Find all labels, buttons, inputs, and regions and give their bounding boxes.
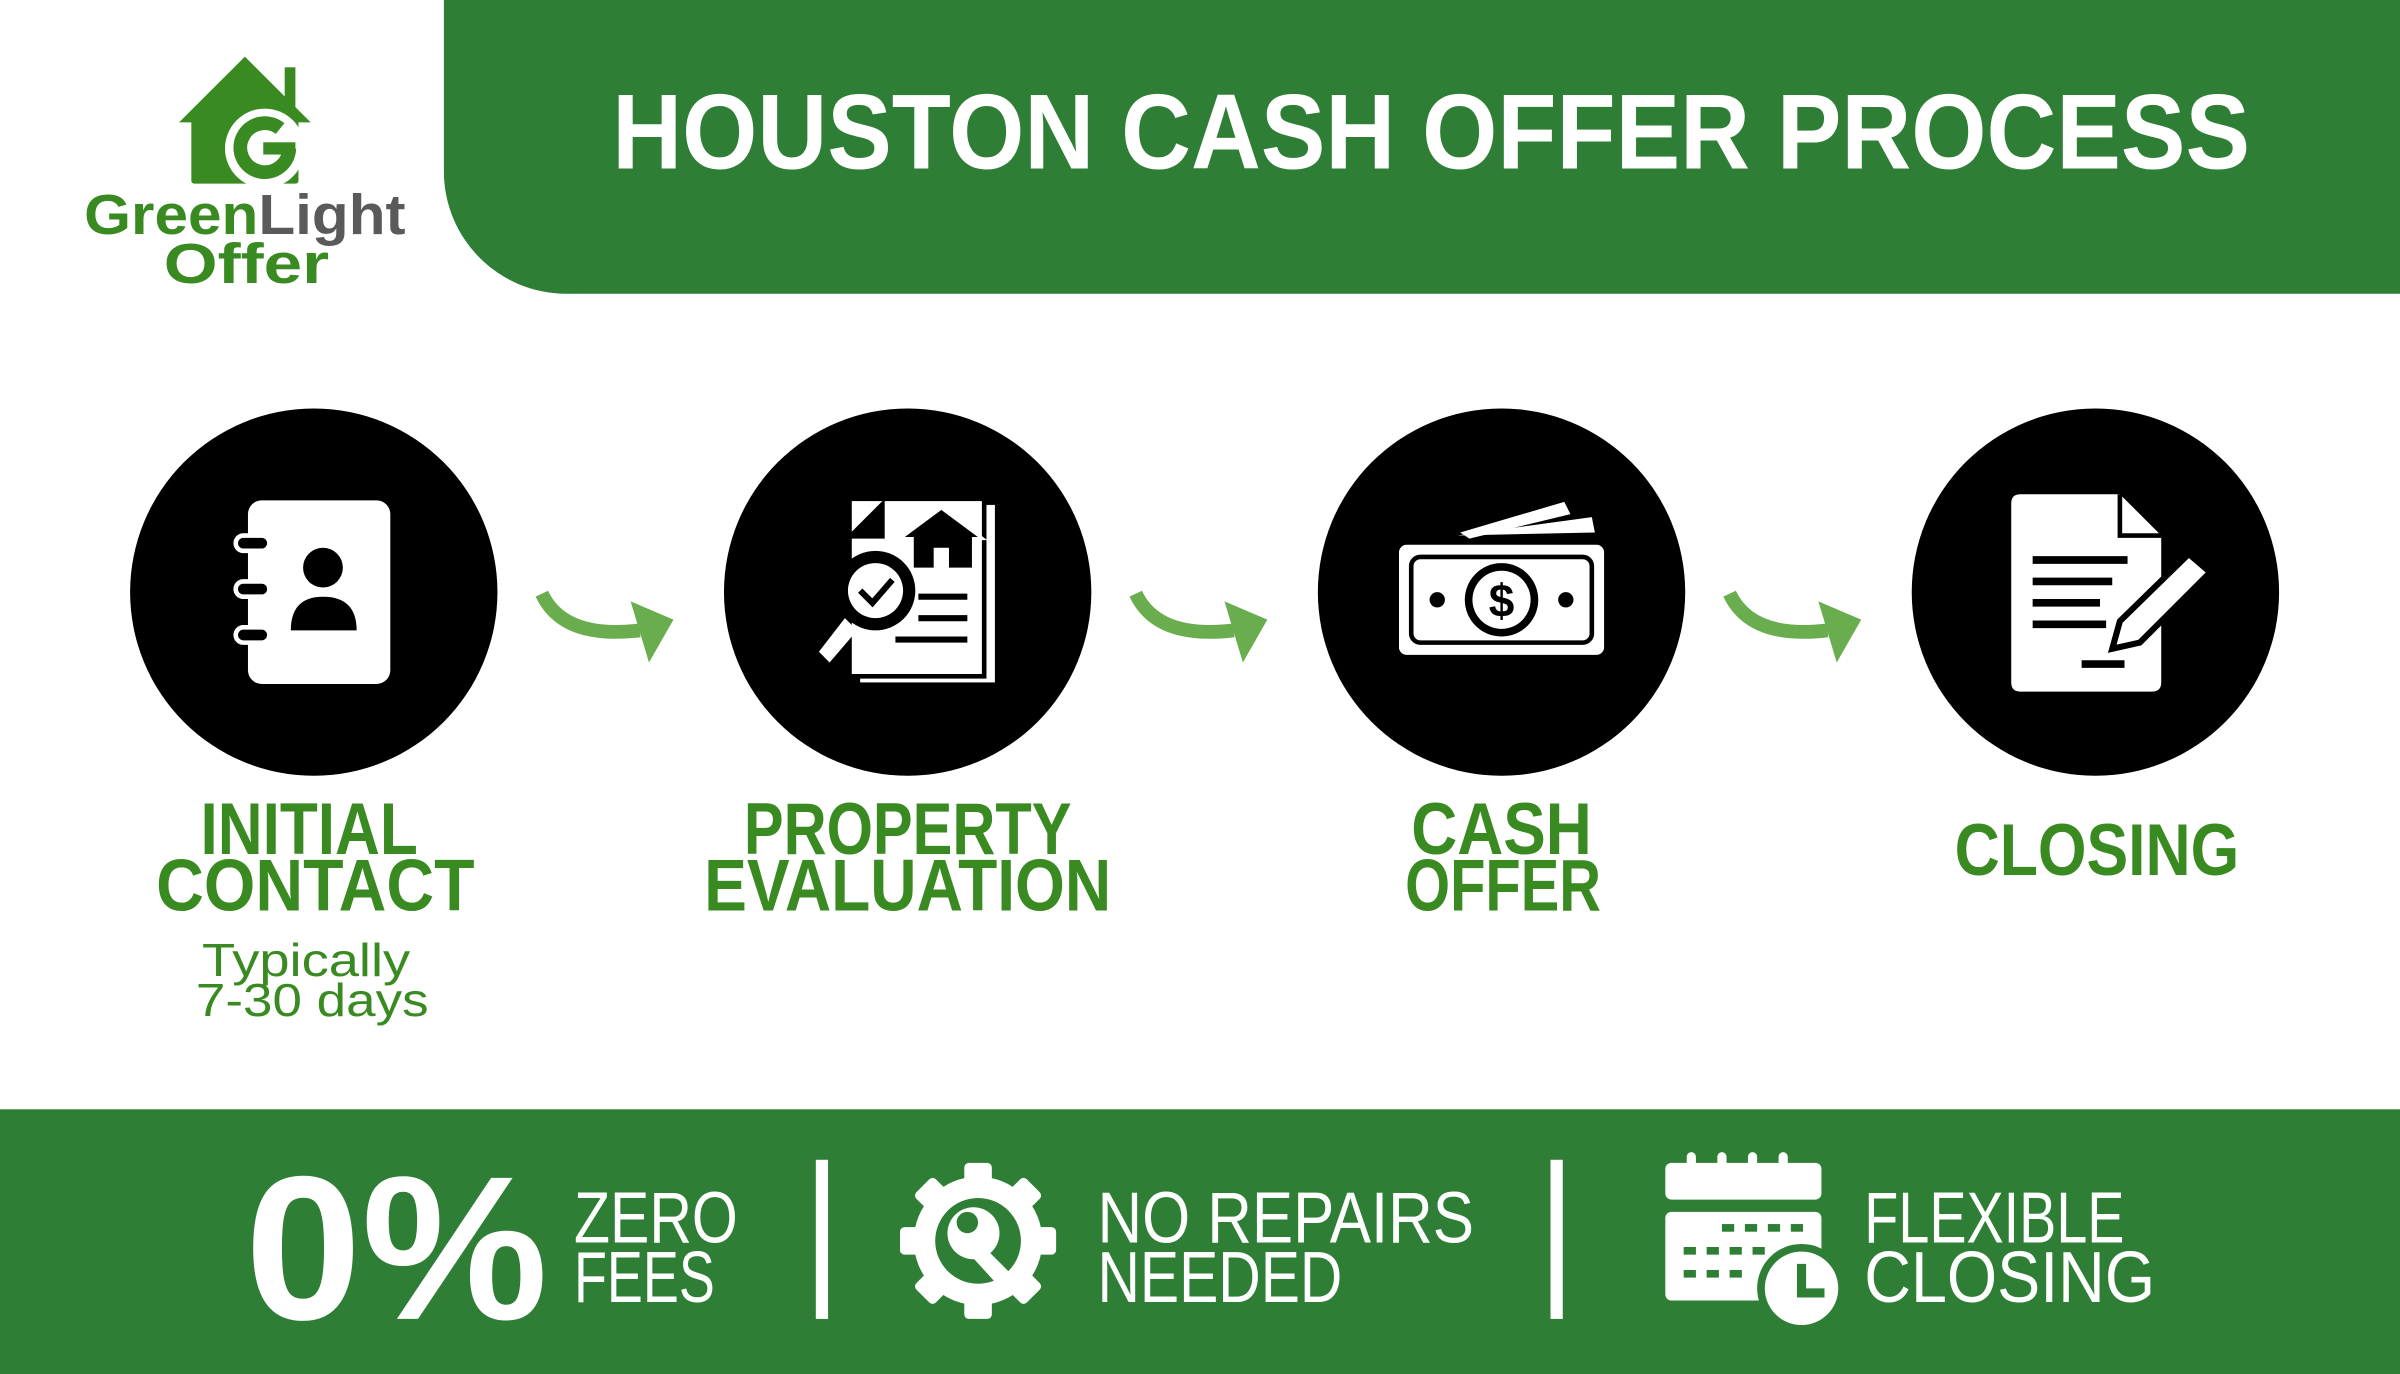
bottom banner bbox=[0, 1109, 2400, 1374]
logo: Offer bbox=[164, 232, 329, 295]
step 1: initial contact: 7-30 days bbox=[196, 974, 429, 1026]
arrow 3 bbox=[1730, 594, 1861, 663]
feature: zero fees: FEES bbox=[574, 1238, 715, 1318]
circle icon: money: $ bbox=[1489, 575, 1514, 627]
icon: calendar clock bbox=[1665, 1152, 1846, 1333]
icon: house bbox=[179, 57, 311, 188]
feature: no repairs: NEEDED bbox=[1097, 1238, 1342, 1318]
feature: flexible closing: FLEXIBLE bbox=[1864, 1178, 2124, 1258]
subtext: Typically bbox=[202, 934, 410, 986]
feature: zero fees bbox=[245, 1134, 738, 1363]
label: CLOSING bbox=[1955, 809, 2239, 891]
title: HOUSTON CASH OFFER PROCESS bbox=[612, 71, 2250, 191]
step 1: initial contact: CONTACT bbox=[156, 844, 475, 926]
logo text: Green Light bbox=[84, 183, 406, 246]
feature: no repairs bbox=[900, 1163, 1474, 1319]
label: INITIAL bbox=[201, 788, 418, 870]
step 3: cash offer: OFFER bbox=[1405, 844, 1601, 926]
circle icon: document with pen bbox=[1912, 409, 2279, 776]
feature: flexible closing bbox=[1665, 1152, 2155, 1333]
feature: zero fees: ZERO bbox=[574, 1178, 738, 1258]
step 3: cash offer bbox=[1318, 409, 1685, 926]
step 2: property evaluation: EVALUATION bbox=[704, 844, 1111, 926]
feature: zero fees: 0% bbox=[245, 1134, 548, 1363]
arrow 1 bbox=[542, 594, 673, 663]
step 2: property evaluation bbox=[704, 409, 1111, 926]
icon: gear wrench bbox=[900, 1163, 1056, 1319]
step 1: initial contact bbox=[130, 409, 497, 1026]
arrow 2 bbox=[1136, 594, 1267, 663]
circle icon: contact book bbox=[130, 409, 497, 776]
circle icon: money bbox=[1318, 409, 1685, 776]
label: CASH bbox=[1411, 788, 1592, 870]
header banner bbox=[444, 0, 2400, 294]
circle icon: document magnifier bbox=[724, 409, 1091, 776]
step 4: closing bbox=[1912, 409, 2279, 891]
feature: flexible closing: CLOSING bbox=[1864, 1238, 2155, 1318]
logo bbox=[84, 57, 406, 295]
feature: no repairs: NO REPAIRS bbox=[1097, 1178, 1474, 1258]
label: PROPERTY bbox=[744, 788, 1071, 870]
